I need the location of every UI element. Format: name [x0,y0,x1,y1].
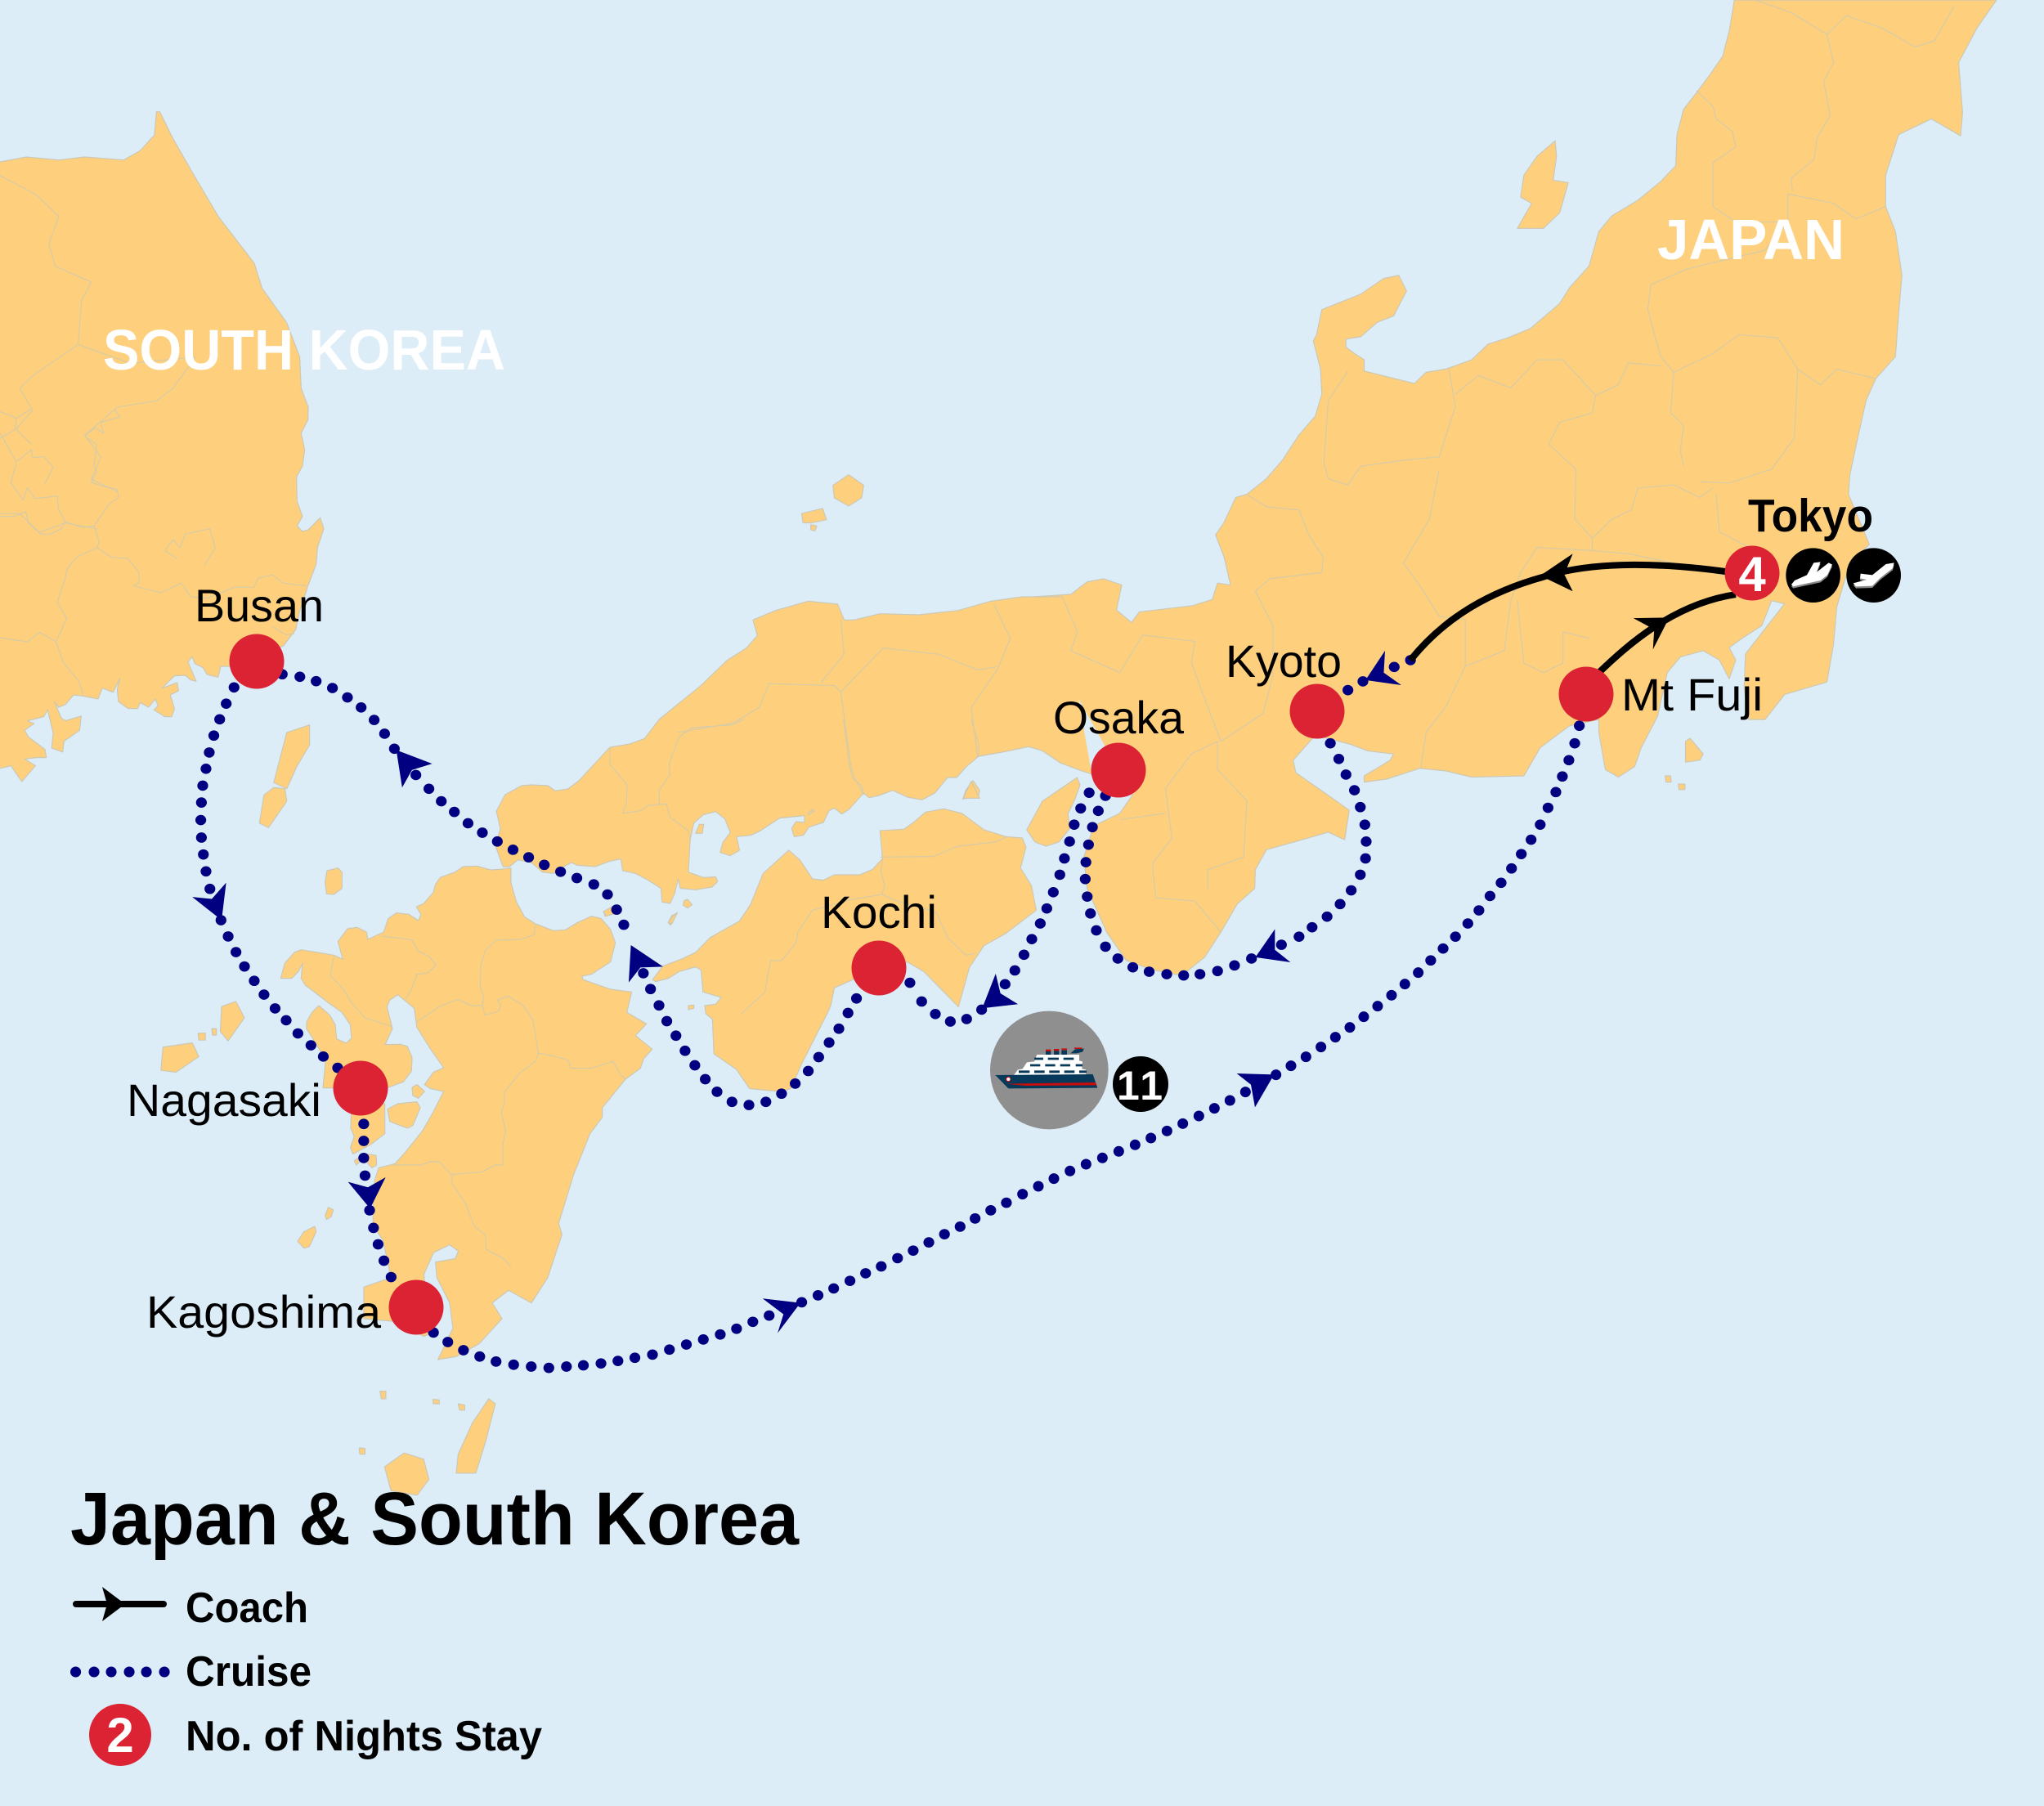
region borders: Honshu east [1061,0,1954,932]
icon: departure plane [1846,548,1901,603]
islands: Inland Sea and Awaji [603,778,1080,1010]
region borders: South Korea north [0,176,195,532]
legend: cruise label: Cruise [186,1648,312,1696]
stop: Kyoto [1226,635,1344,739]
arrow: Kii peninsula [1255,929,1290,962]
coach arrow: westbound [1540,553,1573,591]
ship funnels [1046,1049,1084,1055]
islands: Sado and Izu [1517,141,1703,790]
region borders: Honshu west and Shikoku [610,719,1008,1014]
arrow: Bungo strait [629,945,663,983]
ship hull [995,1074,1097,1088]
arrow: Pacific route [1237,1073,1274,1107]
legend: nights marker: 2 [106,1708,134,1763]
legend: nights marker [89,1704,151,1766]
cruise route arrowheads [192,651,1401,1333]
arrow: near Kochi [982,974,1018,1008]
stop: Busan: Busan [195,580,324,631]
land: Shikoku [652,809,1036,1091]
ship windows [1019,1058,1087,1073]
coach routes [1410,553,1736,673]
stop: Tokyo with 4 nights [1725,490,1873,602]
cruise nights badge: 11 [1113,1056,1168,1112]
cruise route dots [201,660,1580,1368]
cruise route: southern section [338,823,1006,1368]
stop: Osaka [1053,692,1185,798]
stop: Kochi: Kochi [821,886,937,938]
legend: coach label: Coach [186,1584,308,1632]
stop: Osaka: Osaka [1053,692,1185,743]
arrow: Busan south [192,883,226,921]
stop: Busan [195,580,324,688]
land: eastern Honshu [1022,0,1997,975]
country label: South Korea: SOUTH KOREA [103,318,505,382]
legend: nights label: No. of Nights Stay [186,1713,542,1760]
region borders: South Korea south [0,409,307,695]
region borders: Kyushu [330,924,625,1267]
islands: Tsushima, Oki and Goto [161,475,979,1072]
legend: cruise symbol [75,1666,164,1678]
arrow: Kagoshima east [763,1298,800,1333]
cruise route: Busan section [201,674,982,1056]
coach line: Tokyo to Kyoto [1410,565,1732,660]
arrow: Tokyo Kyoto cruise [1365,651,1401,685]
stop: Kochi [821,886,937,996]
stop: Tokyo with 4 nights: 4 [1738,547,1766,602]
stop: Mt Fuji: Mt Fuji [1621,669,1763,720]
islands: south of Kagoshima [198,1028,495,1495]
icon: cruise ship in grey circle [990,1011,1109,1129]
stop: Kyoto: Kyoto [1226,635,1342,687]
cruise route: Pacific section [1023,973,1419,1194]
ship red stripe [1006,1082,1096,1086]
stop: Kagoshima: Kagoshima [146,1286,382,1338]
ship funnel tops [1046,1047,1082,1051]
arrow: Nagasaki to Kagoshima [348,1177,386,1208]
arrow: Busan return [397,750,433,787]
region borders: Honshu far west [678,604,1011,795]
title: Japan & South Korea [70,1477,800,1561]
legend [75,1584,542,1766]
stop: Tokyo with 4 nights: Tokyo [1748,490,1873,542]
stop: Nagasaki [127,1061,388,1126]
cruise nights badge: 11: 11 [1117,1063,1163,1109]
ship life ring [1006,1077,1011,1082]
icon: arrival plane [1786,548,1840,603]
islands: around Kyushu [298,868,677,1248]
stop: Mt Fuji [1558,667,1763,721]
land: western Honshu [495,597,1091,903]
land: Kyushu [280,866,652,1360]
country label: Japan: JAPAN [1657,208,1845,271]
legend: coach symbol [76,1587,164,1621]
cruise route: eastern section [1005,660,1580,984]
ship superstructure [1014,1055,1086,1075]
stop: Nagasaki: Nagasaki [127,1074,321,1126]
stop: Kagoshima [146,1280,443,1338]
coach line: Mt Fuji to Tokyo [1599,594,1736,673]
land: South Korea [0,112,324,782]
coach arrow: eastbound [1634,617,1670,649]
